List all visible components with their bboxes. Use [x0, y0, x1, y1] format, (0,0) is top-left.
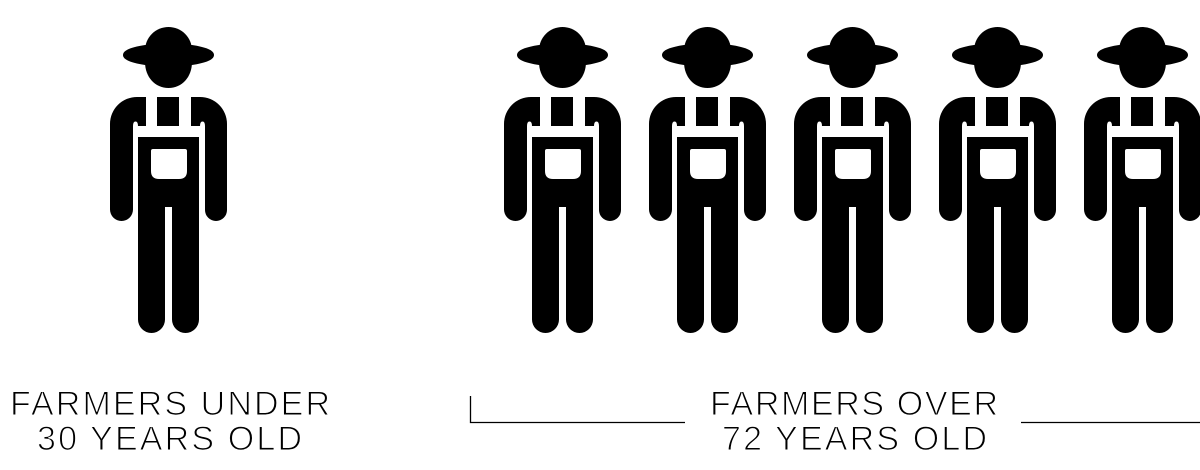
label: farmers over 72 years old: 72 YEARS OLD — [722, 420, 987, 458]
bracket: right segment — [1021, 422, 1200, 424]
bracket: left segment — [470, 396, 685, 422]
icon: farmer under 30 — [110, 27, 227, 333]
icon: farmer 1 — [504, 27, 621, 333]
icon: farmer 3 — [794, 27, 911, 333]
label: farmers over 72 years old — [710, 385, 998, 458]
label: farmers under 30 years old — [10, 385, 330, 458]
label: farmers over 72 years old: FARMERS OVER — [710, 385, 998, 423]
label: farmers under 30 years old: FARMERS UNDER — [10, 385, 330, 423]
icon: farmer 2 — [649, 27, 766, 333]
icon group: five farmers over 72 — [504, 27, 1200, 333]
icon: farmer 5 — [1084, 27, 1200, 333]
label: farmers under 30 years old: 30 YEARS OLD — [37, 420, 302, 458]
icon: farmer 4 — [939, 27, 1056, 333]
